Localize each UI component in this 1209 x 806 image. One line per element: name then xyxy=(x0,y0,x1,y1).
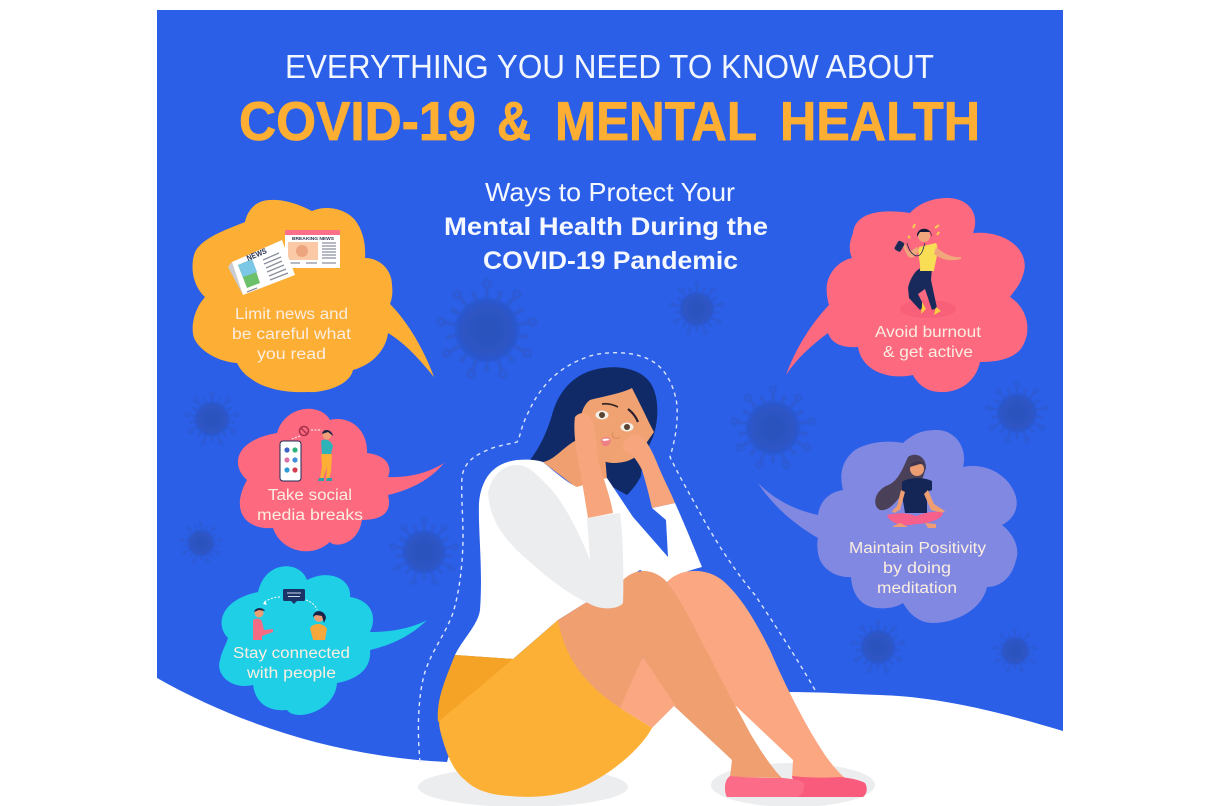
cloud xyxy=(786,198,1027,392)
shirt xyxy=(455,460,702,659)
subtitle: COVID-19 Pandemic xyxy=(483,247,738,275)
panel: meditation xyxy=(758,430,1017,623)
caption xyxy=(875,324,982,361)
panel: stay connected xyxy=(219,566,427,715)
caption: be careful what xyxy=(232,326,352,343)
main heading: & xyxy=(497,90,531,152)
icon: people talking xyxy=(253,589,327,640)
shoes xyxy=(725,776,867,797)
cloud xyxy=(238,409,444,551)
face xyxy=(577,388,654,463)
caption: Maintain Positivity xyxy=(849,540,986,557)
caption: meditation xyxy=(877,580,957,597)
near leg and thigh xyxy=(545,571,782,778)
main heading: COVID-19 xyxy=(239,90,476,152)
right forearm xyxy=(623,435,675,508)
under thigh xyxy=(620,657,675,728)
caption xyxy=(232,306,352,363)
cloud xyxy=(758,430,1017,623)
virus xyxy=(731,386,815,468)
caption: Take social xyxy=(268,487,352,504)
virus xyxy=(986,382,1048,443)
caption: by doing xyxy=(883,560,951,577)
background viruses xyxy=(180,280,1048,673)
neck xyxy=(543,440,607,488)
left forearm xyxy=(574,413,613,518)
skirt shadow xyxy=(438,655,513,722)
subtitle: Mental Health During the xyxy=(444,213,768,241)
panel: limit news xyxy=(192,200,434,392)
panel: blue background xyxy=(157,10,1063,762)
subtitle: Ways to Protect Your xyxy=(485,177,735,207)
virus xyxy=(390,518,458,585)
virus xyxy=(670,282,724,335)
virus xyxy=(437,280,537,378)
main heading: HEALTH xyxy=(780,90,980,152)
face details xyxy=(596,404,638,446)
far leg xyxy=(667,571,845,778)
hair xyxy=(530,367,657,495)
caption: Avoid burnout xyxy=(875,324,982,341)
caption: you read xyxy=(257,346,326,363)
main heading xyxy=(239,90,980,152)
icon: dancing person xyxy=(894,224,961,318)
caption xyxy=(257,487,363,524)
caption: Stay connected xyxy=(233,645,350,662)
virus xyxy=(851,620,905,673)
caption: with people xyxy=(246,665,336,682)
icon: meditating woman xyxy=(875,455,945,528)
caption: Limit news and xyxy=(235,306,348,323)
subtitle xyxy=(444,177,768,275)
icon: newspapers: NEWS xyxy=(245,246,269,263)
icon: newspapers: BREAKING NEWS xyxy=(292,236,334,241)
virus xyxy=(180,522,222,563)
caption: media breaks xyxy=(257,507,363,524)
virus xyxy=(185,392,239,445)
virus xyxy=(993,629,1037,672)
cloud xyxy=(219,566,427,715)
illustration: sad woman xyxy=(418,367,875,806)
skirt xyxy=(439,620,652,797)
panel: avoid burnout xyxy=(786,198,1027,392)
main heading: MENTAL xyxy=(555,90,757,152)
caption xyxy=(233,645,350,682)
caption: & get active xyxy=(883,344,973,361)
cloud xyxy=(192,200,434,392)
caption xyxy=(849,540,986,597)
sleeve xyxy=(488,465,623,608)
title line: EVERYTHING YOU NEED TO KNOW ABOUT xyxy=(285,48,934,85)
panel: social media breaks xyxy=(238,409,444,551)
dashed outline around woman xyxy=(418,353,815,762)
floor shadows xyxy=(418,763,875,806)
icon: phone and person xyxy=(280,426,333,481)
icon: newspapers xyxy=(228,230,340,295)
